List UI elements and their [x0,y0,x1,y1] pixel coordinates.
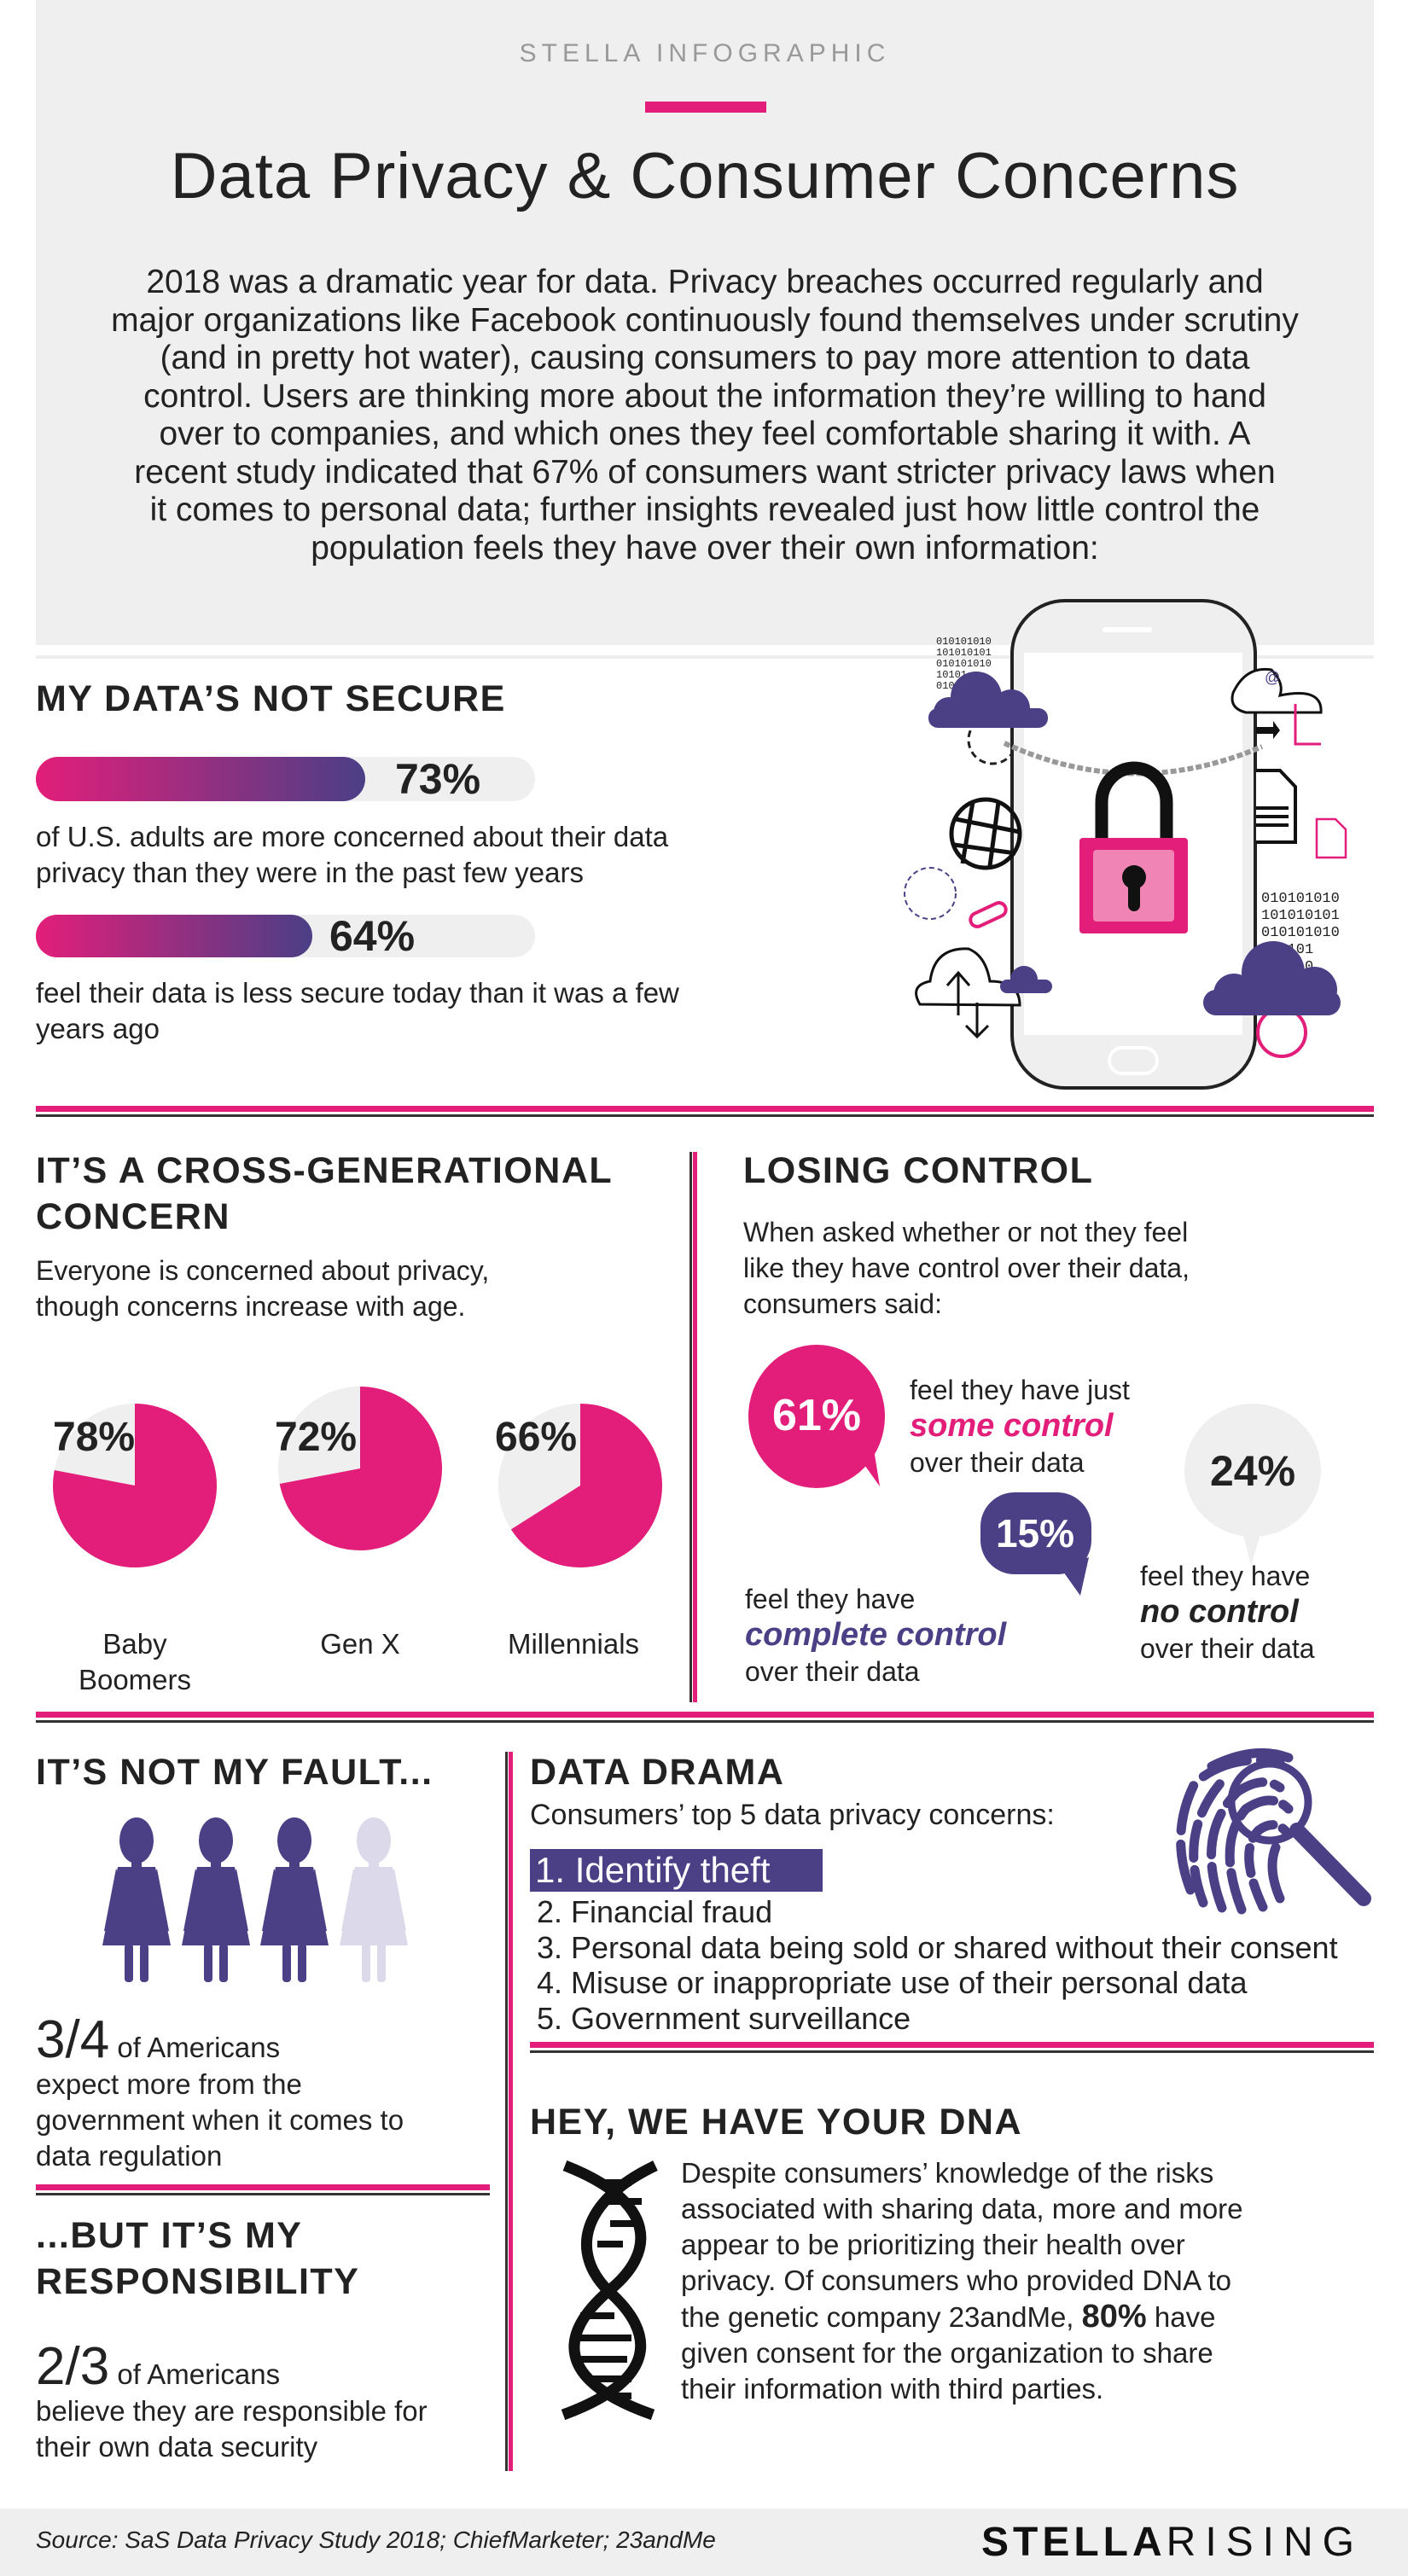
text no control: no control [1140,1594,1299,1630]
binary text left [936,636,992,692]
text 73%: privacy than they were in the past few years [36,857,584,888]
intro paragraph: over to companies, and which ones they feel comfortable sharing it with. A [159,416,1251,452]
stat 3/4 [36,2010,404,2172]
intro paragraph: population feels they have over their own information: [311,529,1099,567]
binary text left: 10101 [936,669,967,681]
text 64% [36,977,679,1044]
pie labels: Boomers [79,1664,191,1695]
highlighted item 1: 1. Identify theft [535,1850,771,1890]
binary right: 101010 [1261,959,1313,975]
paragraph: the genetic company 23andMe, 80% have [681,2299,1215,2335]
pie: millennials 66% [495,1404,662,1567]
list items 2-5: 5. Government surveillance [537,2000,911,2036]
pink gear [1258,1009,1306,1056]
paragraph: their information with third parties. [681,2373,1103,2404]
text some control [910,1375,1130,1478]
panel: hey we have your dna [530,2102,1243,2420]
binary text left: 010101010 [936,658,992,670]
gear purple outline [905,868,956,919]
paragraph: privacy. Of consumers who provided DNA to [681,2265,1231,2296]
panel: but it's my responsibility [36,2215,428,2463]
panel: data drama [530,1747,1371,2036]
purple cloud bottom right [1203,941,1341,1015]
text 64%: feel their data is less secure today than it was a few [36,977,679,1009]
heading: IT’S A CROSS-GENERATIONAL [36,1150,613,1191]
pie charts [53,1387,662,1567]
bubble 15%: 15% [996,1511,1074,1555]
panel: cross-generational concern [36,1150,662,1695]
purple cloud top left [928,672,1048,728]
text no control: over their data [1140,1633,1315,1664]
paragraph: appear to be prioritizing their health over [681,2229,1185,2260]
heading [36,2215,359,2302]
binary text left: 0101 [936,680,961,692]
binary right: 010101010 [1261,891,1340,907]
bar 64%: 64% [329,912,415,960]
stat 2/3: believe they are responsible for [36,2395,428,2427]
heading: IT’S NOT MY FAULT... [36,1752,433,1793]
binary text left: 010101010 [936,636,992,648]
icon: dna helix [561,2160,658,2420]
title: Data Privacy & Consumer Concerns [171,140,1239,212]
heading: LOSING CONTROL [743,1150,1093,1191]
padlock [1102,768,1167,838]
illustration: phone with lock: @ [1265,669,1280,686]
pie labels: Baby [102,1628,167,1660]
header panel [36,0,1374,645]
intro paragraph: 2018 was a dramatic year for data. Privacy breaches occurred regularly and [146,264,1264,300]
stat 2/3: their own data security [36,2431,317,2463]
section: my data's not secure [36,678,679,1044]
list items 2-5: 3. Personal data being sold or shared without their consent [537,1930,1338,1964]
list items 2-5 [537,1894,1338,2036]
pie: gen x 72%: 72% [275,1415,357,1460]
paragraph: associated with sharing data, more and more [681,2193,1243,2224]
phone body [1012,601,1255,1088]
heading [36,1150,613,1237]
logo: stella rising: STELLARISING [981,2520,1364,2565]
outline cloud bottom left [916,949,1020,1005]
pie: millennials 66%: 66% [495,1415,577,1460]
binary right: 010101010 [1261,925,1340,941]
panel: cross-generational concern: Gen X [320,1628,400,1660]
pie: baby boomers 78% [53,1404,217,1567]
icon: fingerprint magnifier [1176,1747,1371,1915]
outline cloud top right with @ [1232,669,1321,712]
stat 2/3 [36,2337,428,2463]
heading: RESPONSIBILITY [36,2261,359,2302]
panel: cross-generational concern: Millennials [508,1628,639,1660]
intro text: like they have control over their data, [743,1253,1190,1283]
intro paragraph: recent study indicated that 67% of consumers want stricter privacy laws when [134,454,1276,490]
bubble 24% [1184,1404,1321,1565]
text no control: feel they have [1140,1561,1310,1591]
intro text [743,1217,1190,1319]
stat 3/4: 3/4 of Americans [36,2010,280,2069]
bar 73% [36,757,535,801]
text some control: some control [910,1408,1114,1444]
text 73%: of U.S. adults are more concerned about their data [36,821,668,852]
pie: baby boomers 78%: 78% [53,1415,135,1460]
stat 3/4: expect more from the [36,2068,302,2100]
footer [0,2509,1408,2576]
paragraph [681,2157,1243,2404]
chain [1004,743,1262,774]
intro paragraph: (and in pretty hot water), causing consumers to pay more attention to data [160,340,1249,376]
text complete control: complete control [745,1617,1006,1653]
text 64%: years ago [36,1013,160,1044]
document icons [1256,770,1295,842]
subtext: Consumers’ top 5 data privacy concerns: [530,1799,1055,1831]
binary right: 010101 [1261,942,1313,958]
text 73% [36,821,669,888]
stat 3/4: data regulation [36,2140,222,2172]
heading: DATA DRAMA [530,1752,784,1793]
panel: losing control [743,1150,1321,1687]
subtext: Everyone is concerned about privacy, [36,1255,489,1286]
pink accent bar [645,102,766,113]
bubble 15% [980,1492,1091,1596]
paragraph: given consent for the organization to share [681,2337,1213,2369]
heading: MY DATA’S NOT SECURE [36,678,506,719]
stat 3/4: government when it comes to [36,2104,404,2136]
text complete control [745,1584,1007,1687]
bubble 61% [748,1345,885,1488]
subtext [36,1255,489,1322]
bar 73%: 73% [395,755,480,803]
list items 2-5: 4. Misuse or inappropriate use of their personal data [537,1965,1247,2000]
illustration: phone with lock [904,599,1347,1090]
pie: gen x 72% [275,1387,442,1550]
text complete control: feel they have [745,1584,915,1614]
binary right [1261,891,1340,975]
pie labels [79,1628,191,1695]
arrow [1256,721,1280,739]
intro paragraph: major organizations like Facebook continuously found themselves under scrutiny [111,302,1299,338]
text complete control: over their data [745,1656,920,1687]
text some control: over their data [910,1447,1085,1478]
text no control [1140,1561,1315,1664]
icon: four women (3 of 4 highlighted) [102,1817,408,1982]
small purple cloud [1000,966,1052,993]
intro text: When asked whether or not they feel [743,1217,1188,1247]
intro paragraph [111,264,1299,567]
paragraph: Despite consumers’ knowledge of the risks [681,2157,1213,2189]
bubble 24%: 24% [1210,1447,1295,1495]
intro paragraph: it comes to personal data; further insights revealed just how little control the [150,491,1260,528]
bar 64% [36,915,535,957]
stat 2/3: 2/3 of Americans [36,2337,280,2396]
binary text left: 101010101 [936,647,992,659]
gear left black [969,716,1016,764]
globe [951,800,1020,868]
heading: CONCERN [36,1196,230,1237]
bubble 61%: 61% [772,1391,861,1440]
list items 2-5: 2. Financial fraud [537,1894,772,1929]
subtext: though concerns increase with age. [36,1291,465,1322]
heading: HEY, WE HAVE YOUR DNA [530,2102,1022,2143]
heading: ...BUT IT’S MY [36,2215,302,2256]
source note: Source: SaS Data Privacy Study 2018; ChiefMarketer; 23andMe [36,2527,716,2553]
text some control: feel they have just [910,1375,1130,1405]
panel: it's not my fault [36,1752,433,2172]
intro paragraph: control. Users are thinking more about the information they’re willing to hand [143,377,1266,415]
binary right: 101010101 [1261,908,1340,924]
intro text: consumers said: [743,1288,942,1319]
kicker: stella infographic: STELLA INFOGRAPHIC [520,39,890,67]
pink link [969,900,1008,929]
